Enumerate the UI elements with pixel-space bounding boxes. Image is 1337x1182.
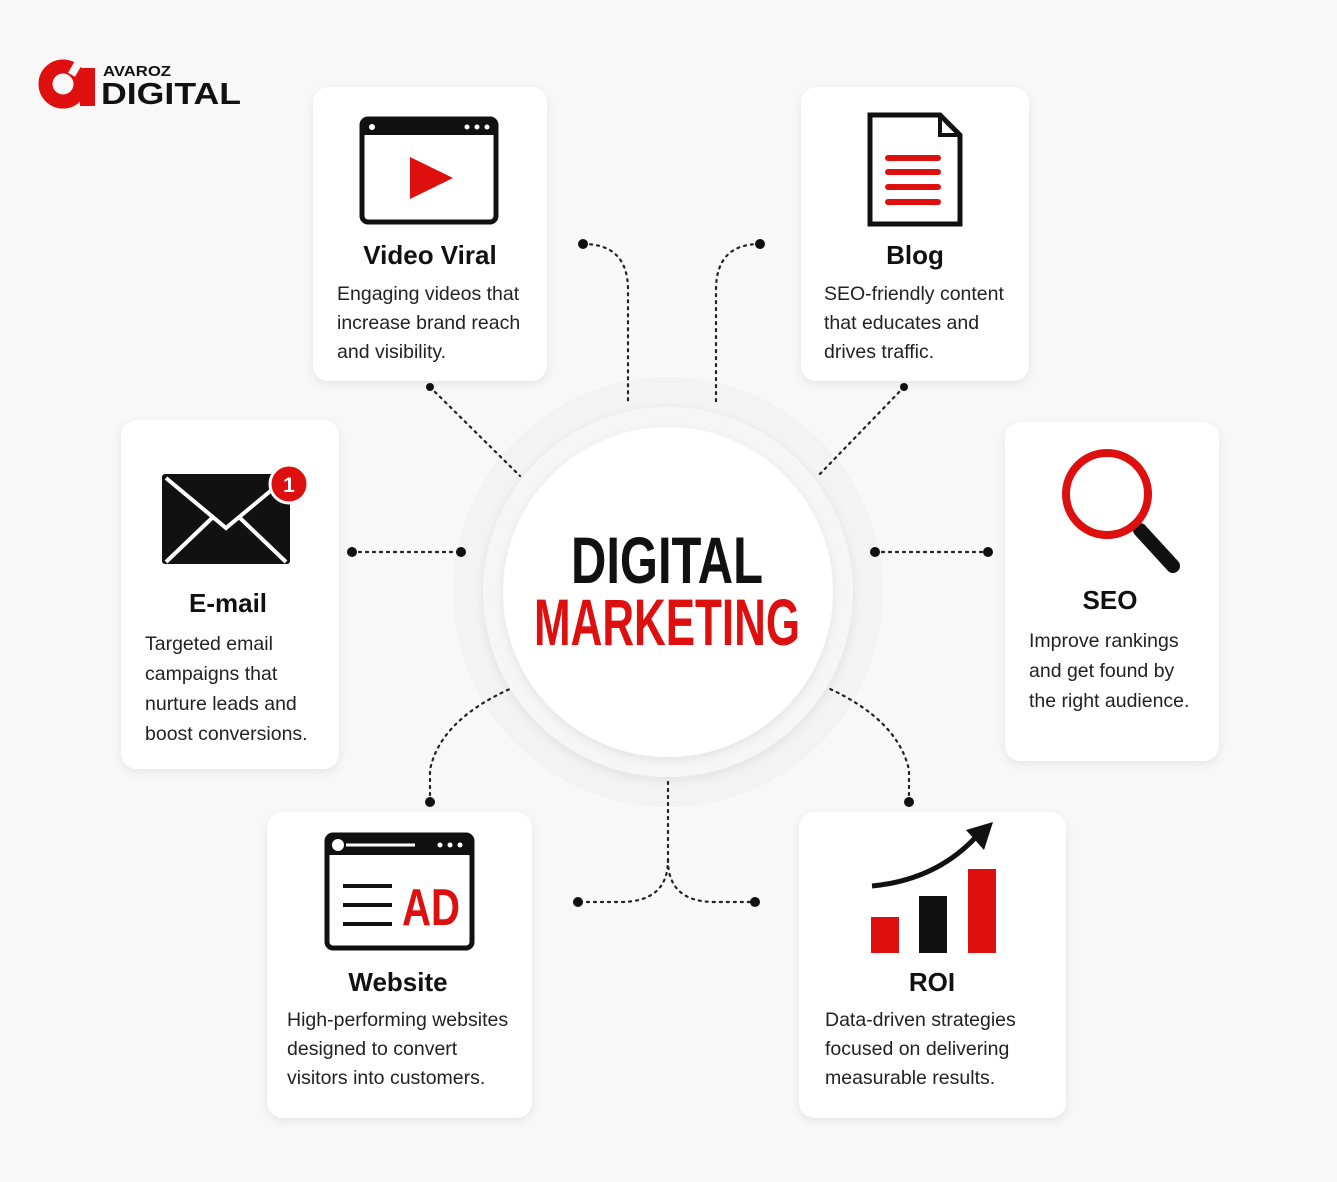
panel: roi <box>799 812 1066 1118</box>
panel: email: campaigns that <box>145 663 278 685</box>
panel: blog: that educates and <box>824 312 979 334</box>
icon: growth chart <box>871 822 996 953</box>
panel: roi: Data-driven strategies <box>825 1009 1016 1031</box>
panel: seo: and get found by <box>1029 660 1175 682</box>
panel: seo: the right audience. <box>1029 690 1189 712</box>
panel: website <box>267 812 532 1118</box>
center circle: DIGITAL <box>571 523 763 597</box>
panel: website: High-performing websites <box>287 1009 508 1031</box>
panel: email: E-mail <box>189 588 267 618</box>
panel: seo: SEO <box>1083 585 1137 615</box>
icon: envelope: 1 <box>283 474 295 497</box>
panel: blog: SEO-friendly content <box>824 283 1005 305</box>
panel: website: designed to convert <box>287 1038 458 1060</box>
panel: seo <box>1005 422 1219 761</box>
panel: website: Website <box>348 967 448 997</box>
icon: magnifier <box>1066 453 1173 566</box>
connectors <box>352 244 988 902</box>
panel: video viral: increase brand reach <box>337 312 520 334</box>
icon: ad browser: AD <box>402 879 460 937</box>
panel: video viral: and visibility. <box>337 341 446 363</box>
panel: video viral <box>313 87 547 381</box>
icon: envelope <box>162 465 308 564</box>
panel: roi: focused on delivering <box>825 1038 1009 1060</box>
panel: video viral: Engaging videos that <box>337 283 520 305</box>
logo: AVAROZ <box>103 63 171 80</box>
panel: roi: ROI <box>909 967 955 997</box>
icon: video player <box>362 119 496 222</box>
panel: blog: Blog <box>886 240 944 270</box>
panel: email: Targeted email <box>145 633 273 655</box>
center outer ring <box>453 377 883 807</box>
panel: email: nurture leads and <box>145 693 297 715</box>
panel: email <box>121 420 339 769</box>
panel: email: boost conversions. <box>145 723 308 745</box>
panel: blog: drives traffic. <box>824 341 934 363</box>
panel: video viral: Video Viral <box>363 240 497 270</box>
icon: ad browser <box>327 835 472 948</box>
center circle: MARKETING <box>534 585 800 659</box>
panel: roi: measurable results. <box>825 1067 995 1089</box>
panel: website: visitors into customers. <box>287 1067 485 1089</box>
center circle <box>483 407 853 777</box>
logo <box>46 57 241 111</box>
panel: seo: Improve rankings <box>1029 630 1179 652</box>
panel: blog <box>801 87 1029 381</box>
icon: document <box>870 115 960 224</box>
logo: DIGITAL <box>101 76 241 111</box>
